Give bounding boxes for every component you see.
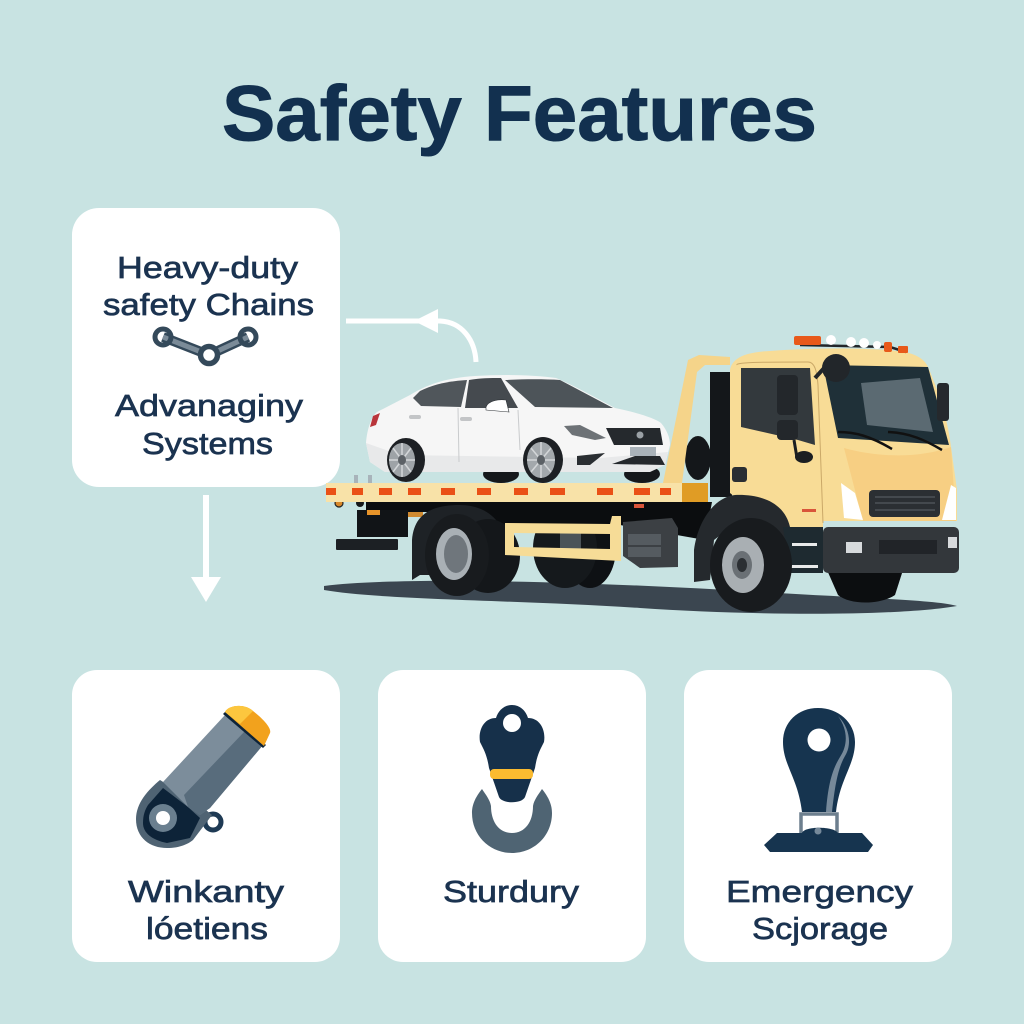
text: heavy-duty safety chains [103,250,314,322]
label: Scjorage [752,911,888,946]
cab [730,335,957,527]
arrow: down to bottom panels [191,495,221,602]
front wheel [710,518,792,612]
label: Sturdury [443,874,580,909]
panel: sturdury [378,670,646,962]
text: advanaginy systems: Systems [142,426,273,461]
panel: emergency storage [684,670,952,962]
text: advanaginy systems [115,388,304,461]
under-bed frame [366,502,712,540]
label [726,874,914,946]
illustration: flatbed tow truck with car [324,335,959,614]
label: Emergency [726,874,914,909]
headlights [841,483,863,520]
mirrors [777,375,798,415]
text: advanaginy systems: Advanaginy [115,388,304,423]
roof beacons [794,335,908,353]
headboard post [663,355,732,497]
icon: tow hook [472,705,552,853]
grille [869,490,940,517]
side window [741,368,815,445]
yellow side guard [505,516,621,561]
rear bumper assembly [335,475,423,550]
front wheel arch [694,495,790,582]
panel: chains and systems [72,208,340,487]
icon: chain [155,329,256,364]
text: heavy-duty safety chains: Heavy-duty [117,250,299,285]
label [128,874,285,946]
wipers [838,432,942,450]
label: Winkanty [128,874,285,909]
ground shadow [324,581,957,614]
title: Safety Features [222,69,817,157]
windscreen [823,365,949,445]
step and bumper [783,527,959,602]
label: lóetiens [146,911,268,946]
fuel tank [623,518,678,568]
middle wheels [533,508,616,588]
icon: emergency anchor [764,708,873,852]
rear wheel [412,505,520,596]
flatbed deck [326,483,708,508]
car [366,375,670,483]
text: heavy-duty safety chains: safety Chains [103,287,314,322]
panel: winkanty loetiens [72,670,340,962]
arrow: truck to chains panel [346,309,476,362]
icon: winch cylinder [136,706,270,848]
